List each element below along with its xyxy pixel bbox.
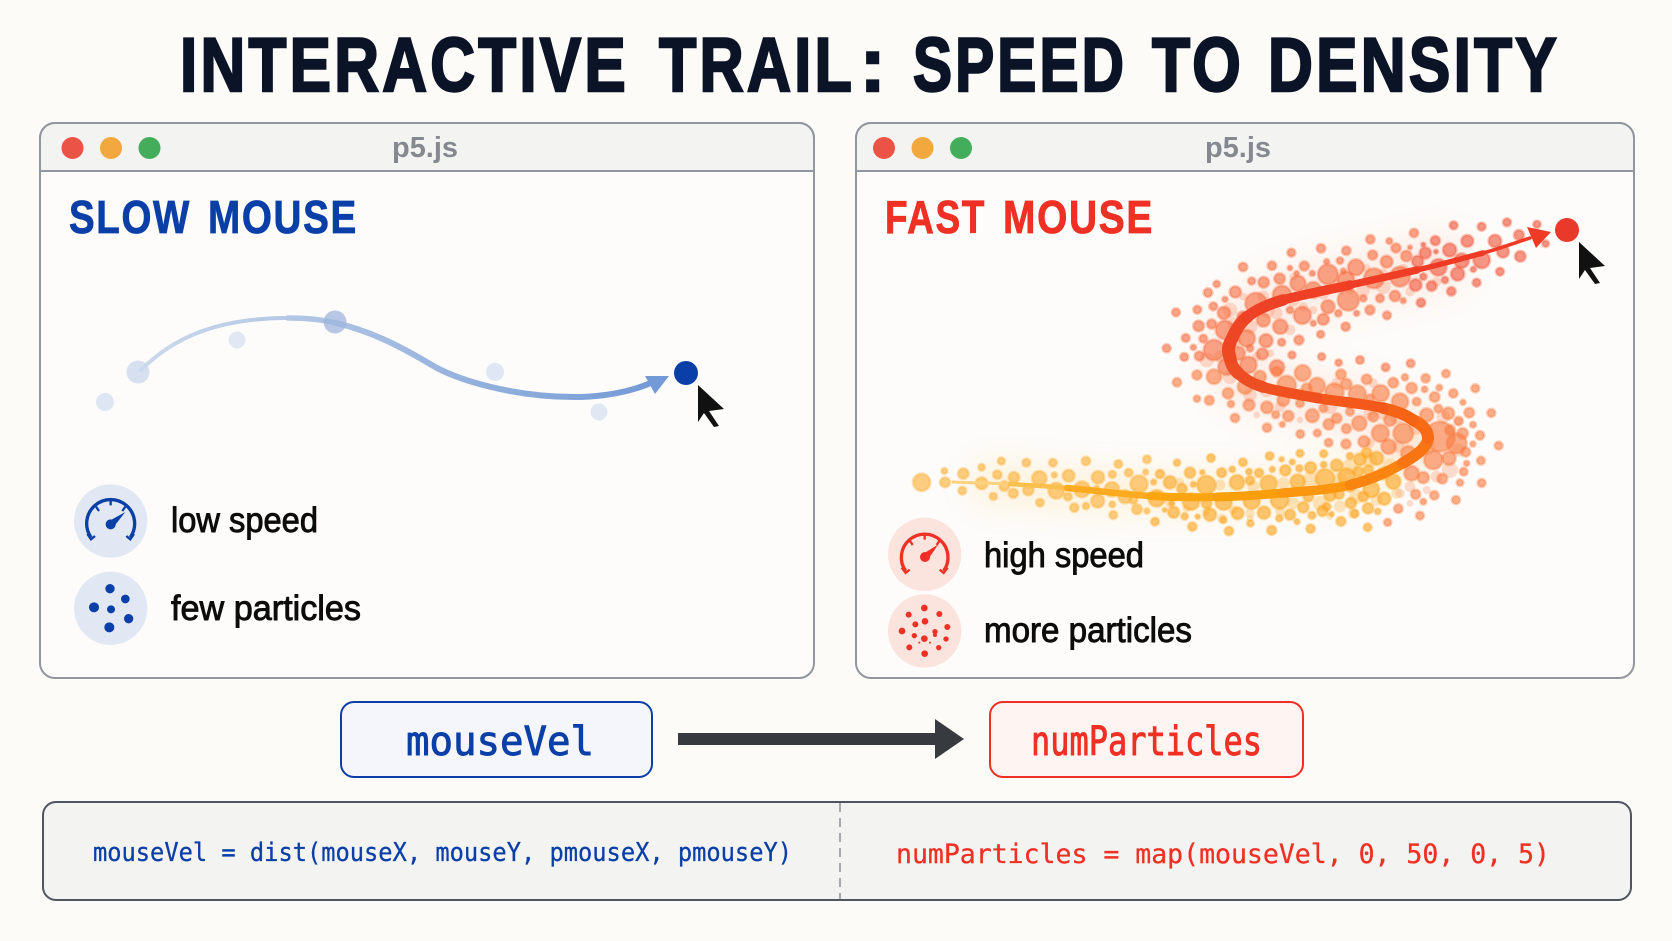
label: more particles: more particles <box>984 611 1192 650</box>
title <box>180 23 1560 108</box>
icon: more particles <box>888 594 961 668</box>
code panel <box>43 802 1631 900</box>
title: TO <box>1152 23 1244 108</box>
icon: low speed gauge <box>74 484 147 558</box>
window control buttons <box>873 137 972 159</box>
particles: lower strand <box>1148 448 1401 535</box>
cursor: fast <box>1579 242 1605 284</box>
code: mouseVel formula: mouseVel = dist(mouseX, mouseY, pmouseX, pmouseY) <box>93 838 792 868</box>
variable box: mouseVel <box>341 702 652 777</box>
title: INTERACTIVE <box>180 23 629 108</box>
window title: p5.js: p5.js <box>392 132 458 164</box>
cursor: slow <box>698 385 724 427</box>
heading: slow mouse: SLOW <box>69 191 191 243</box>
particles: near arrow tip <box>1410 218 1549 307</box>
particles: upper strand <box>1163 229 1418 375</box>
window control buttons <box>62 137 160 159</box>
variable box: numParticles <box>990 702 1303 777</box>
fast trail with tapered stroke <box>953 218 1579 497</box>
heading: fast mouse: FAST <box>885 191 986 243</box>
pale filler particles: bend <box>1223 369 1465 507</box>
window title: p5.js: p5.js <box>1205 132 1271 164</box>
particles: middle bend <box>1173 365 1503 526</box>
soft glow under particles <box>990 262 1440 493</box>
label: high speed: high speed <box>984 536 1144 575</box>
label: few particles: few particles <box>171 589 361 628</box>
arrow: mouseVel to numParticles <box>678 719 964 759</box>
pale filler particles: upper <box>1199 264 1441 367</box>
title: TRAIL <box>659 23 855 108</box>
title: : <box>860 23 889 108</box>
title: DENSITY <box>1268 23 1560 108</box>
panel: slow mouse window <box>40 123 814 678</box>
icon: few particles <box>74 572 147 645</box>
pale filler particles: lower <box>1165 453 1402 523</box>
label: low speed: low speed <box>171 501 318 540</box>
heading: slow mouse: MOUSE <box>208 191 358 243</box>
panel: fast mouse window <box>856 123 1634 678</box>
code: numParticles formula: numParticles = map(mouseVel, 0, 50, 0, 5) <box>896 839 1550 870</box>
heading: fast mouse <box>885 191 1154 243</box>
variable box: mouseVel: mouseVel <box>406 719 594 765</box>
heading: slow mouse <box>69 191 358 243</box>
variable box: numParticles: numParticles <box>1031 719 1262 765</box>
icon: high speed gauge <box>888 518 961 591</box>
particles: tail <box>913 455 1151 519</box>
slow trail with sparse particles <box>96 310 698 420</box>
title: SPEED <box>913 23 1127 108</box>
dense particle cloud <box>913 218 1549 535</box>
heading: fast mouse: MOUSE <box>1003 191 1154 243</box>
